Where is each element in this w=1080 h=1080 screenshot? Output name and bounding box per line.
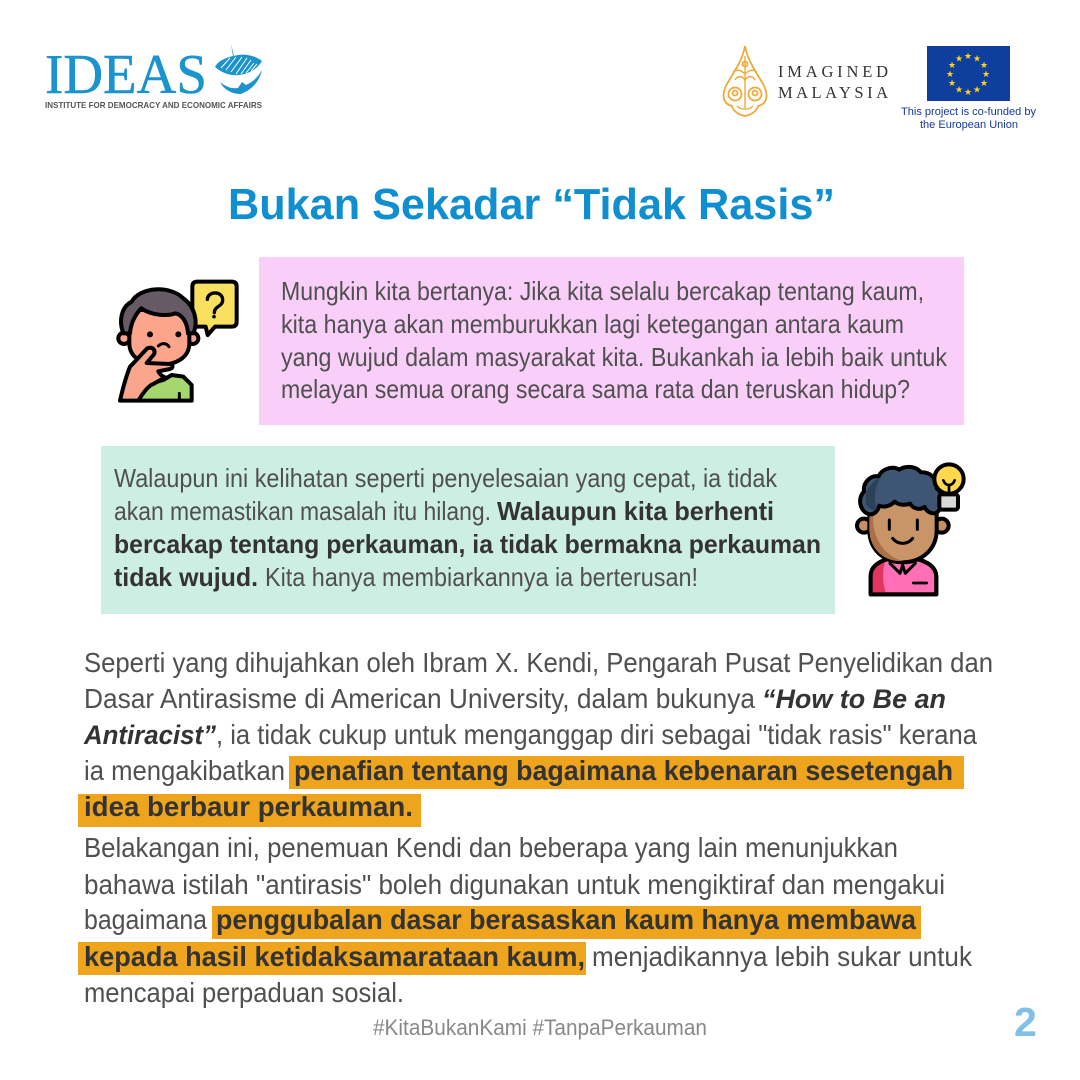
text block: Kendi paragraph: , ia tidak cukup untuk menganggap diri sebagai "tidak rasis" kerana bbox=[216, 719, 977, 750]
text block: antirasis paragraph: bahawa istilah "antirasis" boleh digunakan untuk mengiktiraf dan mengakui bbox=[84, 869, 945, 900]
highlight: penggubalan bbox=[212, 906, 921, 939]
panel: question bbox=[259, 257, 964, 425]
panel: question: melayan semua orang secara sama rata dan teruskan hidup? bbox=[281, 374, 910, 404]
logo: European Union flag and funding note: ★ bbox=[964, 51, 972, 61]
logo: European Union flag and funding note: ★ bbox=[948, 78, 956, 88]
panel: answer: Walaupun ini kelihatan seperti penyelesaian yang cepat, ia tidak bbox=[114, 463, 778, 493]
text block: antirasis paragraph: kepada hasil ketidaksamarataan kaum, bbox=[84, 941, 585, 972]
text block: antirasis paragraph bbox=[78, 832, 973, 1008]
text block: antirasis paragraph: menjadikannya lebih sukar untuk bbox=[592, 941, 973, 972]
logo: IDEAS: IDEAS bbox=[45, 44, 207, 106]
text block: Kendi paragraph bbox=[78, 647, 993, 827]
logo: European Union flag and funding note: ★ bbox=[982, 69, 990, 79]
logo: European Union flag and funding note: ★ bbox=[955, 84, 963, 94]
panel: answer: tidak wujud. bbox=[114, 562, 258, 592]
logo: European Union flag and funding note: ★ bbox=[980, 60, 988, 70]
text block: Kendi paragraph: Seperti yang dihujahkan oleh Ibram X. Kendi, Pengarah Pusat Penyelidikan dan bbox=[84, 647, 993, 678]
text block: antirasis paragraph: bagaimana bbox=[84, 904, 207, 935]
panel: question: kita hanya akan memburukkan lagi ketegangan antara kaum bbox=[281, 309, 904, 339]
panel: answer: Kita hanya membiarkannya ia berterusan! bbox=[265, 562, 698, 592]
hashtags: #KitaBukanKami #TanpaPerkauman bbox=[373, 1015, 707, 1040]
text block: antirasis paragraph: Belakangan ini, penemuan Kendi dan beberapa yang lain menunjukkan bbox=[84, 832, 898, 863]
logo: European Union flag and funding note: ★ bbox=[964, 87, 972, 97]
icon: thinking person with question mark bbox=[118, 282, 237, 401]
logo: European Union flag and funding note: the European Union bbox=[920, 119, 1018, 131]
logo: European Union flag and funding note: This project is co-funded by bbox=[901, 106, 1036, 118]
highlight: idea berbaur bbox=[78, 794, 421, 827]
panel: answer: akan memastikan masalah itu hilang. bbox=[114, 496, 491, 526]
icon: person with light bulb bbox=[857, 464, 964, 594]
logo: IDEAS: INSTITUTE FOR DEMOCRACY AND ECONOMIC AFFAIRS bbox=[45, 100, 262, 110]
logo: European Union flag and funding note: ★ bbox=[980, 78, 988, 88]
page number: 2 bbox=[1014, 999, 1037, 1045]
icon: wayang leaf emblem bbox=[724, 46, 766, 116]
panel: answer: bercakap tentang perkauman, ia tidak bermakna perkauman bbox=[114, 529, 821, 559]
text block: Kendi paragraph: Dasar Antirasisme di American University, dalam bukunya bbox=[84, 683, 755, 714]
logo: European Union flag and funding note: ★ bbox=[955, 54, 963, 64]
text block: antirasis paragraph: mencapai perpaduan sosial. bbox=[84, 977, 404, 1008]
panel: question: Mungkin kita bertanya: Jika kita selalu bercakap tentang kaum, bbox=[281, 276, 924, 306]
text block: Kendi paragraph: penafian tentang bagaimana kebenaran sesetengah bbox=[294, 755, 953, 786]
text block: Kendi paragraph: idea berbaur perkauman. bbox=[84, 791, 413, 822]
panel: answer: Walaupun kita berhenti bbox=[497, 496, 774, 526]
logo: Imagined Malaysia: IMAGINED bbox=[778, 62, 888, 81]
text block: Kendi paragraph: Antiracist” bbox=[83, 720, 216, 750]
text block: Kendi paragraph: ia mengakibatkan bbox=[84, 755, 285, 786]
logo: European Union flag and funding note: ★ bbox=[946, 69, 954, 79]
logo: European Union flag and funding note: ★ bbox=[948, 60, 956, 70]
text block: Kendi paragraph: “How to Be an bbox=[762, 684, 946, 714]
panel: question: yang wujud dalam masyarakat kita. Bukankah ia lebih baik untuk bbox=[281, 342, 948, 372]
logo: European Union flag and funding note: ★ bbox=[973, 54, 981, 64]
title: Bukan Sekadar “Tidak Rasis” bbox=[228, 180, 835, 229]
text block: antirasis paragraph: penggubalan dasar berasaskan kaum hanya membawa bbox=[216, 904, 916, 935]
panel: answer bbox=[101, 446, 835, 614]
highlight: kepada hasil bbox=[78, 942, 586, 975]
logo: European Union flag and funding note bbox=[901, 46, 1036, 131]
highlight: penafian bbox=[289, 756, 964, 789]
logo: Imagined Malaysia bbox=[724, 46, 888, 116]
logo: Imagined Malaysia: MALAYSIA bbox=[778, 83, 888, 102]
logo: European Union flag and funding note: ★ bbox=[973, 84, 981, 94]
